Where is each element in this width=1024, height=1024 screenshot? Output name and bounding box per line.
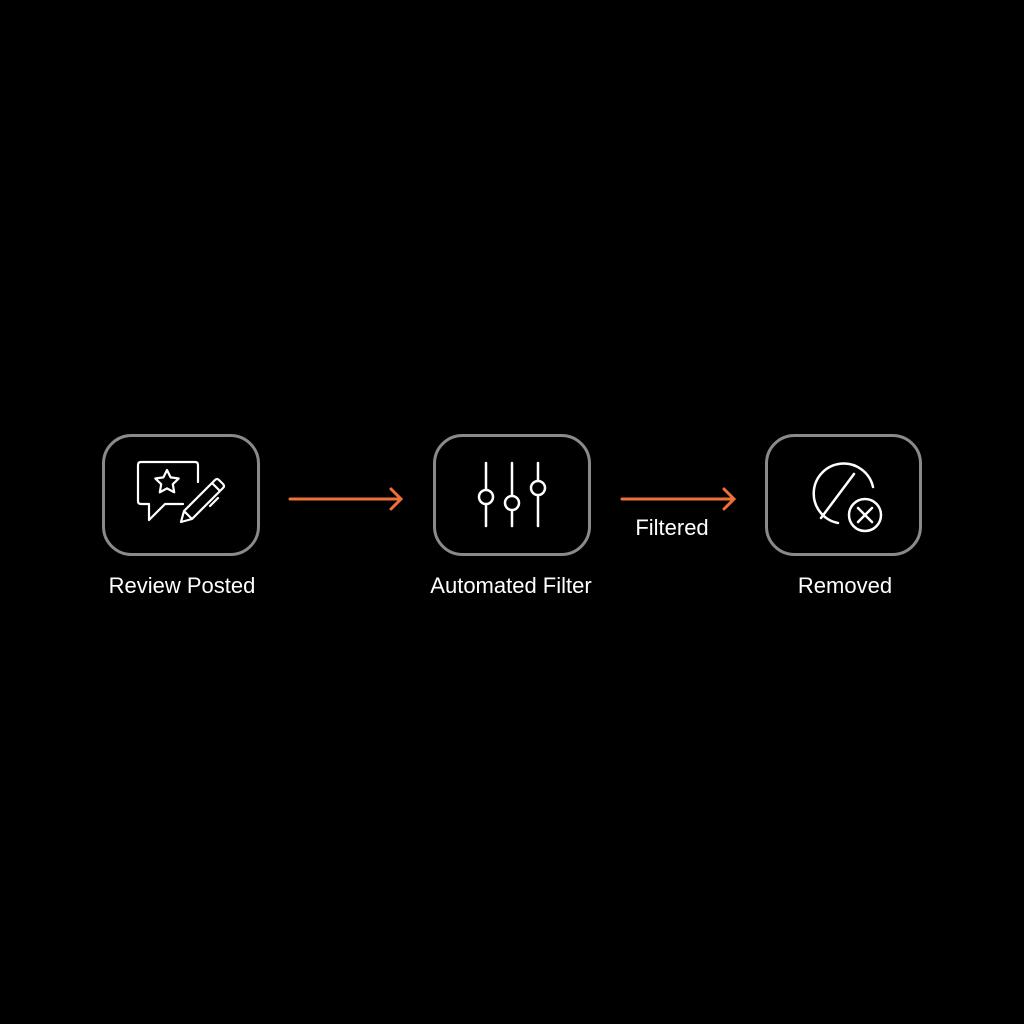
- label: Filtered: Filtered: [635, 515, 709, 540]
- box: removed: [766, 436, 920, 554]
- step 2: automated filter: [430, 436, 592, 598]
- arrow 1: [290, 489, 401, 509]
- step 1: review posted: [104, 436, 258, 598]
- step 3: removed: [766, 436, 920, 598]
- arrow 2 with label: [622, 489, 734, 540]
- box: review posted: [104, 436, 258, 554]
- icon: review bubble with star and pencil: [138, 462, 224, 522]
- label: Removed: Removed: [798, 573, 892, 598]
- icon: sliders: [479, 463, 545, 526]
- label: Review Posted: Review Posted: [109, 573, 255, 598]
- label: Automated Filter: Automated Filter: [430, 573, 592, 598]
- box: automated filter: [434, 436, 590, 554]
- icon: blocked circle with x: [814, 464, 881, 531]
